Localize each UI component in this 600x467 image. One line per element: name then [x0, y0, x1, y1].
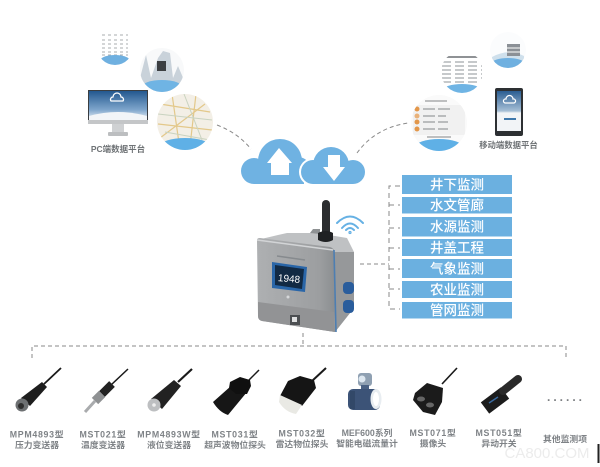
- label: MEF600: 智能电磁流量计: [336, 438, 398, 448]
- label: MPM4893W: 液位变送器: [147, 439, 191, 450]
- label: MST071: MST071型: [410, 427, 456, 438]
- box: 农业监测: [402, 281, 512, 298]
- heading: PC platform: PC端数据平台: [91, 144, 145, 154]
- label: MST021: MST021型: [80, 428, 126, 440]
- connector: device to applications: [360, 263, 389, 265]
- label: MEF600: [336, 427, 398, 448]
- edge mark: [598, 444, 600, 463]
- label: MST051: 异动开关: [481, 438, 517, 448]
- label: MPM4893: MPM4893型: [10, 428, 64, 440]
- label: MST032: [276, 428, 329, 449]
- sensor: MST031: [213, 370, 259, 415]
- label: MST032: MST032型: [279, 428, 325, 438]
- icon: PC monitor: [88, 90, 148, 136]
- circle: data table (PC): [101, 34, 129, 65]
- bracket: application links: [389, 186, 400, 309]
- label: MST031: 超声波物位探头: [204, 439, 266, 450]
- ellipsis: other items: ......: [547, 390, 585, 404]
- watermark: CA800.COM: [504, 445, 590, 462]
- circle: status list (mobile): [413, 100, 465, 151]
- label: MST071: [410, 427, 456, 448]
- box: 管网监测: [402, 302, 512, 318]
- application list: [402, 175, 512, 318]
- icon: upload cloud: [241, 139, 311, 184]
- box: 管网监测: 管网监测: [430, 302, 484, 318]
- circle: data table (mobile): [442, 56, 482, 93]
- sensor: MST021: [85, 369, 128, 412]
- sensor: MST071: [413, 368, 457, 415]
- label: MST021: 温度变送器: [81, 439, 125, 450]
- device: data logger: [257, 200, 354, 332]
- box: 水源监测: [402, 217, 512, 236]
- sensor: MPM4893W: [148, 369, 192, 412]
- label: MST051: [476, 427, 522, 448]
- label: MPM4893W: [137, 428, 201, 450]
- box: 井下监测: [402, 175, 512, 194]
- label: MST071: 摄像头: [420, 438, 446, 448]
- sensor: MEF600: [348, 373, 382, 410]
- label: MPM4893: [10, 428, 64, 450]
- label: MPM4893W: MPM4893W型: [137, 428, 201, 440]
- icon: mobile device: [495, 88, 523, 136]
- circle: map (PC): [157, 94, 213, 154]
- box: 水文管廊: [402, 197, 512, 214]
- box: 井下监测: 井下监测: [430, 178, 484, 192]
- sensor: MPM4893: [16, 368, 61, 412]
- box: 农业监测: 农业监测: [430, 282, 484, 298]
- box: 井盖工程: [402, 239, 512, 256]
- label: MST051: MST051型: [476, 427, 522, 438]
- label: MPM4893: 压力变送器: [15, 439, 59, 450]
- label: MEF600: MEF600系列: [342, 427, 393, 438]
- arrow: upload: [267, 148, 292, 175]
- label: MST021: [80, 428, 126, 450]
- connector: sensor bus: [32, 333, 566, 358]
- heading: mobile platform: 移动端数据平台: [479, 140, 538, 150]
- circle: building chart (PC): [140, 51, 183, 92]
- circle: device list (mobile): [492, 44, 524, 68]
- icon: download cloud: [299, 145, 365, 186]
- box: 井盖工程: 井盖工程: [430, 240, 484, 256]
- label: MST031: MST031型: [212, 428, 258, 440]
- label: MST032: 雷达物位探头: [276, 438, 329, 449]
- box: 水源监测: 水源监测: [430, 220, 484, 234]
- box: 气象监测: 气象监测: [430, 260, 484, 276]
- box: 气象监测: [402, 259, 512, 278]
- connector: PC platform to cloud: [217, 125, 251, 149]
- label: MST031: [204, 428, 266, 450]
- display reading: 1948: [277, 273, 301, 286]
- connector: cloud to mobile platform: [357, 123, 408, 153]
- box: 水文管廊: 水文管廊: [430, 197, 484, 213]
- arrow: download: [323, 155, 345, 181]
- sensor: MST032: [279, 368, 326, 414]
- label: other items: 其他监测项: [543, 433, 587, 444]
- sensor: MST051: [485, 379, 518, 408]
- icon: wifi: [337, 216, 363, 233]
